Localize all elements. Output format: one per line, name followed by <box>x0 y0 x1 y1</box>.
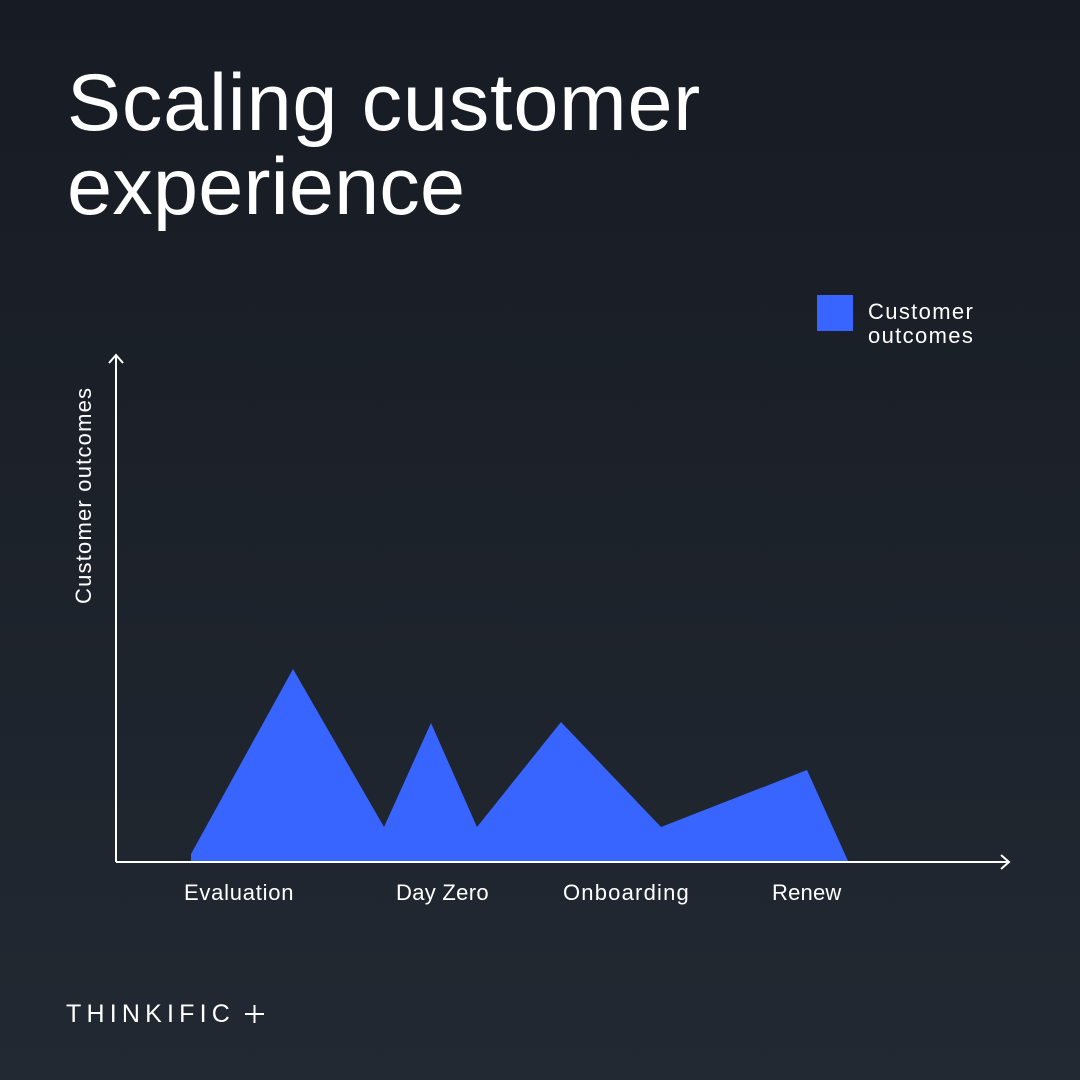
title: Scaling customer <box>67 58 701 148</box>
legend label: Customer <box>868 299 974 324</box>
logo plus icon <box>245 1005 264 1023</box>
logo: Thinkific plus <box>66 1000 264 1028</box>
y axis label: Customer outcomes <box>71 387 96 604</box>
logo wordmark: THINKIFIC <box>66 1000 235 1028</box>
legend label: outcomes <box>868 323 974 348</box>
x axis label: Onboarding: Onboarding <box>563 880 690 905</box>
legend label <box>868 299 974 348</box>
title: experience <box>67 142 465 232</box>
area: customer outcomes <box>191 669 848 861</box>
x axis label: Renew: Renew <box>772 880 841 905</box>
legend <box>817 295 974 348</box>
x axis label: Evaluation: Evaluation <box>184 880 294 905</box>
title <box>67 58 701 232</box>
axes with arrows <box>109 355 1009 869</box>
legend swatch <box>817 295 853 331</box>
x axis label: Day Zero: Day Zero <box>396 880 489 905</box>
